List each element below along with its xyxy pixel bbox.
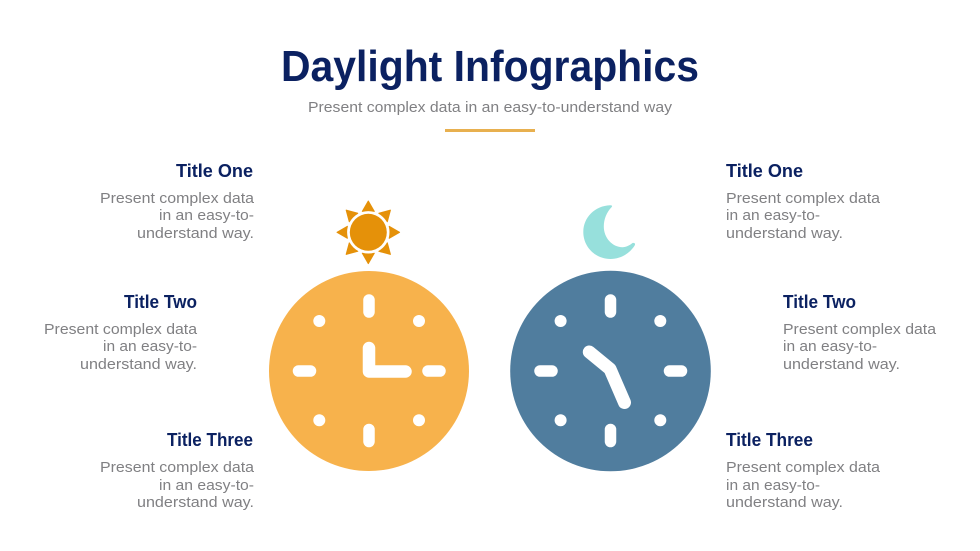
clock ticks: night <box>540 300 682 442</box>
clock: day <box>269 271 469 471</box>
title: Daylight Infographics <box>281 42 699 91</box>
right text: title three: in an easy-to- <box>726 477 820 494</box>
clock dots: day <box>313 315 425 426</box>
right text: title three: understand way. <box>726 494 843 511</box>
clock: night <box>510 271 711 471</box>
right text: title one: Present complex data <box>726 190 881 207</box>
left text: title three: in an easy-to- <box>159 477 254 494</box>
left text: title three: Title Three <box>167 430 253 450</box>
right text: title one: Title One <box>726 161 803 181</box>
left text: title one: in an easy-to- <box>159 207 254 224</box>
left text: title three <box>100 430 255 511</box>
left text: title one: understand way. <box>137 225 254 242</box>
left text: title one: Title One <box>176 161 253 181</box>
left text: title two: in an easy-to- <box>103 338 197 355</box>
right text: title two: Present complex data <box>783 321 937 338</box>
right text: title one <box>726 161 881 242</box>
right text: title three: Present complex data <box>726 459 881 476</box>
left text: title two: Present complex data <box>44 321 198 338</box>
subtitle: Present complex data in an easy-to-understand way <box>308 99 673 116</box>
right text: title three: Title Three <box>726 430 813 450</box>
right text: title three <box>726 430 881 511</box>
left text: title one: Present complex data <box>100 190 255 207</box>
left text: title one <box>100 161 255 242</box>
right text: title one: in an easy-to- <box>726 207 820 224</box>
left text: title two <box>44 292 198 373</box>
accent underline <box>445 129 535 132</box>
icon: moon <box>583 205 635 259</box>
right text: title two <box>783 292 937 373</box>
left text: title two: Title Two <box>124 292 197 312</box>
left text: title three: Present complex data <box>100 459 255 476</box>
left text: title two: understand way. <box>80 356 197 373</box>
right text: title two: understand way. <box>783 356 900 373</box>
left text: title three: understand way. <box>137 494 254 511</box>
clock hands: night <box>589 352 624 402</box>
clock hands: day <box>369 348 406 372</box>
clock ticks: day <box>298 300 440 442</box>
right text: title one: understand way. <box>726 225 843 242</box>
icon: sun <box>337 201 400 264</box>
right text: title two: in an easy-to- <box>783 338 877 355</box>
right text: title two: Title Two <box>783 292 856 312</box>
clock dots: night <box>555 315 666 426</box>
